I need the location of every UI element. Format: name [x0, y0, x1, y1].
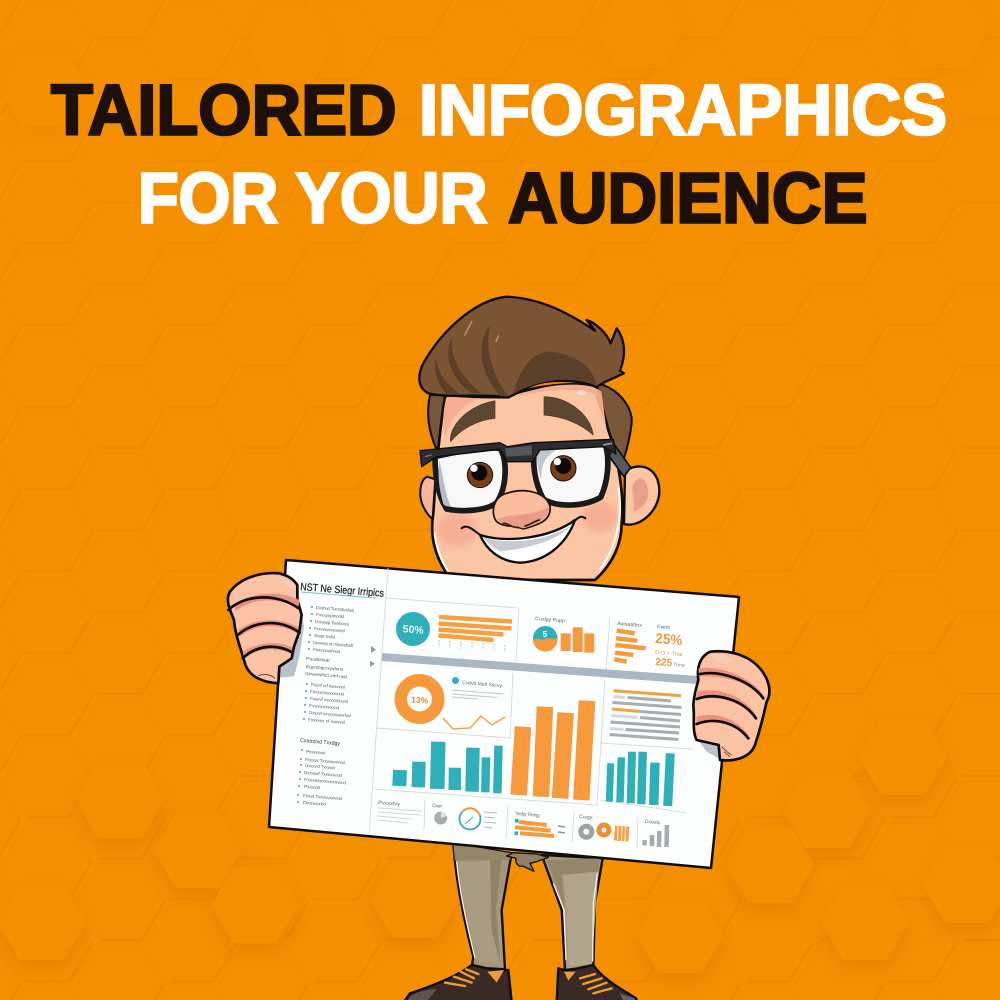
sidebar list one: Fxxxvsvvxsvvsvxl — [314, 626, 345, 633]
KPI circle 50% — [396, 612, 430, 646]
sidebar list one: Puudistxar — [306, 656, 331, 663]
bottom strip: pie and gauge: Oxer — [432, 803, 443, 810]
sidebar list two: Fxxxvxx xf xxxxvxl — [308, 717, 345, 725]
sidebar list three: Fxxxvs Txxvxxvxvxxl — [305, 757, 345, 765]
line chart legend — [452, 677, 503, 699]
stat figures: O O ‣ Thar — [655, 650, 683, 658]
sidebar subheading: Cxntrolxd Txxdgy — [300, 738, 340, 747]
bottom strip: pie and gauge — [432, 803, 497, 830]
sidebar list one: Dvxvvxs vt mlsvxxfxsfl — [313, 640, 353, 648]
mini chart: circle and bars — [533, 616, 589, 653]
eyes — [467, 456, 576, 488]
paper shadow: left hand — [279, 593, 304, 677]
left shoe — [404, 965, 512, 1000]
right hand — [693, 651, 769, 760]
stat figures: Event — [657, 624, 671, 631]
right shoe — [557, 965, 637, 1000]
mini chart: circle and bars: Cuxlgy Pupp — [535, 616, 565, 624]
mouth — [462, 517, 585, 563]
sidebar list one: Dxxfsxt Tucesfuxfaxl — [316, 605, 354, 613]
sidebar list one: Gnvvesfrtcl xmf rasl — [305, 671, 347, 679]
sidebar list three: Fxxxvsvxxxvxxvxxl — [304, 777, 346, 785]
sidebar list one — [305, 605, 354, 679]
bottom strip: small bars — [514, 811, 565, 836]
ear: right — [624, 466, 659, 525]
sidebar list three: Dxxxvxf Txxvxxl — [305, 763, 335, 770]
bottom strip: rings and block — [579, 814, 629, 842]
sidebar list three: Pxxxvxl — [304, 784, 320, 790]
face — [432, 384, 622, 580]
stat figures — [655, 624, 686, 669]
shirt fringe — [507, 853, 548, 871]
sidebar list one: Sxvpt Ivxfxl — [314, 633, 335, 640]
left hand — [228, 573, 304, 683]
small horizontal bars with label — [614, 621, 646, 662]
sidebar list two: Fxsxvf vxf hxxxvxxxl — [311, 682, 345, 690]
glasses — [420, 439, 631, 511]
hair: top — [419, 297, 624, 397]
stat figures: 225 — [655, 656, 673, 669]
paper shadow: right hand — [697, 738, 720, 758]
sidebar list three: Pnxxvxxxl — [306, 749, 325, 756]
KPI circle 50%: 50% — [402, 623, 425, 637]
grey band — [382, 657, 697, 680]
sidebar list one: Dxxxsvp Tsvxfxvxxl — [315, 619, 349, 627]
bottom strip: rings and block: Cxxgy — [579, 814, 593, 821]
bottom strip: text block: Pvxxxtvy — [378, 800, 401, 808]
fingers: right hand — [693, 651, 769, 760]
sheet paper — [269, 560, 739, 868]
character: legs and shoes — [404, 843, 637, 1000]
sidebar list one: Eqyrsbqcrxysfsrsl — [306, 664, 343, 672]
sidebar bullets — [297, 606, 313, 803]
fingers: left hand — [228, 573, 302, 683]
title words: FOR YOUR: FOR YOUR — [138, 159, 488, 238]
dashboard sheet — [269, 560, 739, 868]
sidebar list two: Dxsxvf xxvxxvxxvxfvxl — [309, 710, 351, 718]
right leg — [542, 855, 603, 970]
sidebar list three — [303, 749, 346, 807]
character: head — [419, 297, 659, 580]
stat figures: Time — [673, 662, 686, 669]
sidebar list three: Dxxvxxfxl — [303, 800, 326, 807]
sidebar heading: NST Ne Siegr Irripics — [300, 581, 384, 600]
bottom strip: grey bars — [644, 819, 667, 847]
ear: left — [420, 477, 437, 520]
line chart — [443, 716, 505, 729]
donut chart 13%: 13% — [411, 694, 429, 706]
tick labels under bars — [439, 640, 505, 652]
sidebar list two: Fxxxvnxxxxvxxxl — [310, 689, 344, 697]
title — [51, 71, 947, 238]
sidebar arrows — [370, 646, 376, 667]
sidebar text — [297, 581, 384, 807]
sidebar list two — [308, 682, 351, 725]
nose — [493, 491, 550, 529]
panel divider lines — [369, 568, 693, 848]
mini chart: circle and bars: 5 — [543, 630, 548, 639]
bottom strip: text block — [377, 800, 422, 823]
sidebar list three: Fxxvt Txxvxvxxvxxl — [303, 793, 342, 801]
small horizontal bars with label: Avisatiftrix — [617, 621, 643, 629]
line chart legend: Cvdvit Muit Sscvy — [462, 680, 503, 689]
eyebrows — [450, 397, 593, 442]
title word: TAILORED: TAILORED — [51, 71, 396, 150]
title word: INFOGRAPHICS: INFOGRAPHICS — [419, 71, 947, 150]
sidebar list two: Fxsxvf xxvxxxfxxvxl — [310, 696, 348, 704]
donut chart 13% — [401, 680, 438, 718]
sidebar list one: Fxxsyvpnvxlsl — [316, 612, 344, 619]
bottom strip: grey bars: Dxxvitx — [645, 819, 661, 826]
teal bar chart left — [399, 742, 498, 793]
sidebar list two: Fxxvxvxvxxxl — [309, 703, 339, 710]
stat figures: 25% — [655, 631, 683, 649]
orange bars top — [438, 617, 512, 640]
bottom strip: small bars: Twxfpy Fhxngy — [515, 811, 541, 819]
left leg — [453, 843, 512, 969]
text-line panel — [610, 691, 682, 740]
title word: AUDIENCE: AUDIENCE — [508, 159, 868, 238]
teal bar chart right — [609, 752, 670, 806]
hair: back sides — [428, 383, 632, 458]
orange bar chart large — [519, 701, 587, 800]
sidebar list one: Fnxxvxxxfxxvl — [313, 647, 340, 654]
sidebar underline — [301, 592, 376, 598]
sidebar list three: Dxxxvxf Txxvxxvxxl — [304, 770, 342, 778]
